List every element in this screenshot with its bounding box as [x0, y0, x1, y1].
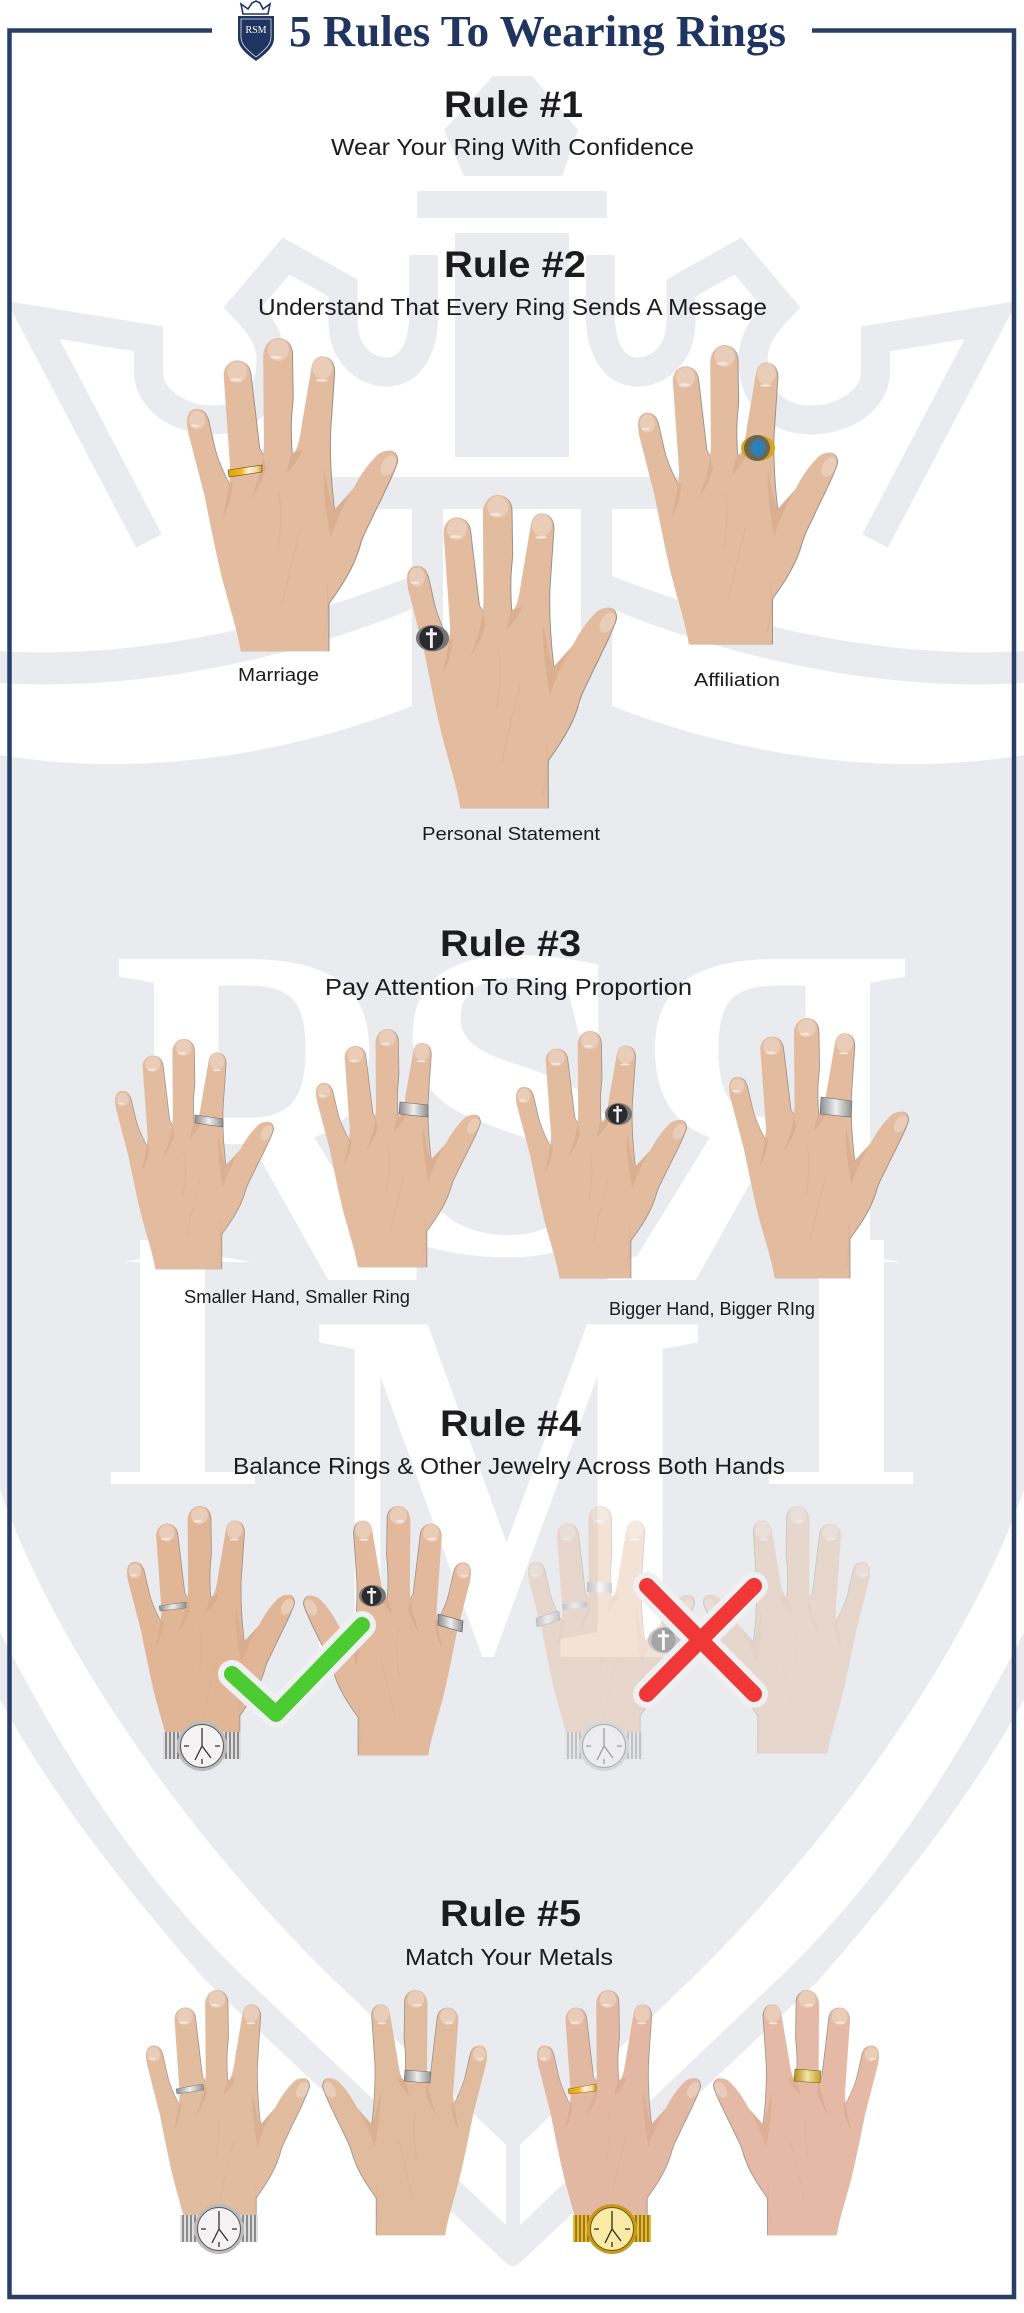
label: personal statement: Personal Statement — [422, 823, 600, 844]
hand: smaller hand, thin ring — [115, 1039, 275, 1269]
hand: bigger hand, wide ring — [729, 1018, 910, 1278]
hand: marriage — [187, 338, 399, 651]
logo: crowned shield: RSM — [245, 25, 267, 36]
gold hands — [537, 1990, 879, 2254]
icon: check mark — [232, 1625, 362, 1714]
watermark: brand crest: S — [387, 853, 637, 1351]
hand: affiliation — [638, 345, 839, 644]
heading: rule 1: Rule #1 — [444, 84, 583, 125]
label: smaller hand: Smaller Hand, Smaller Ring — [184, 1286, 410, 1307]
hand: bigger hand, cross ring — [516, 1031, 688, 1278]
rule 1 — [331, 84, 694, 160]
logo: crowned shield — [238, 1, 274, 61]
correct pair of hands — [127, 1506, 471, 1771]
hand: smaller hand, wide ring — [316, 1029, 482, 1267]
heading: rule 5: Rule #5 — [440, 1893, 581, 1934]
watermark: brand crest: M — [312, 1204, 710, 1767]
rule 3 — [115, 923, 910, 1319]
hand: personal statement — [407, 495, 618, 808]
subheading: rule 4: Balance Rings & Other Jewelry Across Both Hands — [233, 1453, 785, 1479]
rule 5 — [146, 1893, 879, 2254]
icon: cross mark — [647, 1586, 754, 1694]
silver hands — [146, 1990, 487, 2254]
header — [238, 1, 786, 61]
heading: rule 3: Rule #3 — [440, 923, 581, 964]
title: 5 Rules To Wearing Rings — [289, 7, 786, 56]
subheading: rule 3: Pay Attention To Ring Proportion — [325, 974, 692, 1000]
subheading: rule 5: Match Your Metals — [405, 1944, 613, 1970]
label: affiliation: Affiliation — [694, 669, 780, 690]
label: marriage: Marriage — [238, 664, 319, 685]
subheading: rule 2: Understand That Every Ring Sends A Message — [258, 294, 767, 320]
faded incorrect pair of hands — [528, 1506, 870, 1771]
rule 4 — [127, 1403, 870, 1771]
subheading: rule 1: Wear Your Ring With Confidence — [331, 134, 694, 160]
rule 2 — [187, 244, 839, 844]
heading: rule 4: Rule #4 — [440, 1403, 581, 1444]
label: bigger hand: Bigger Hand, Bigger RIng — [609, 1298, 815, 1319]
heading: rule 2: Rule #2 — [444, 244, 586, 285]
